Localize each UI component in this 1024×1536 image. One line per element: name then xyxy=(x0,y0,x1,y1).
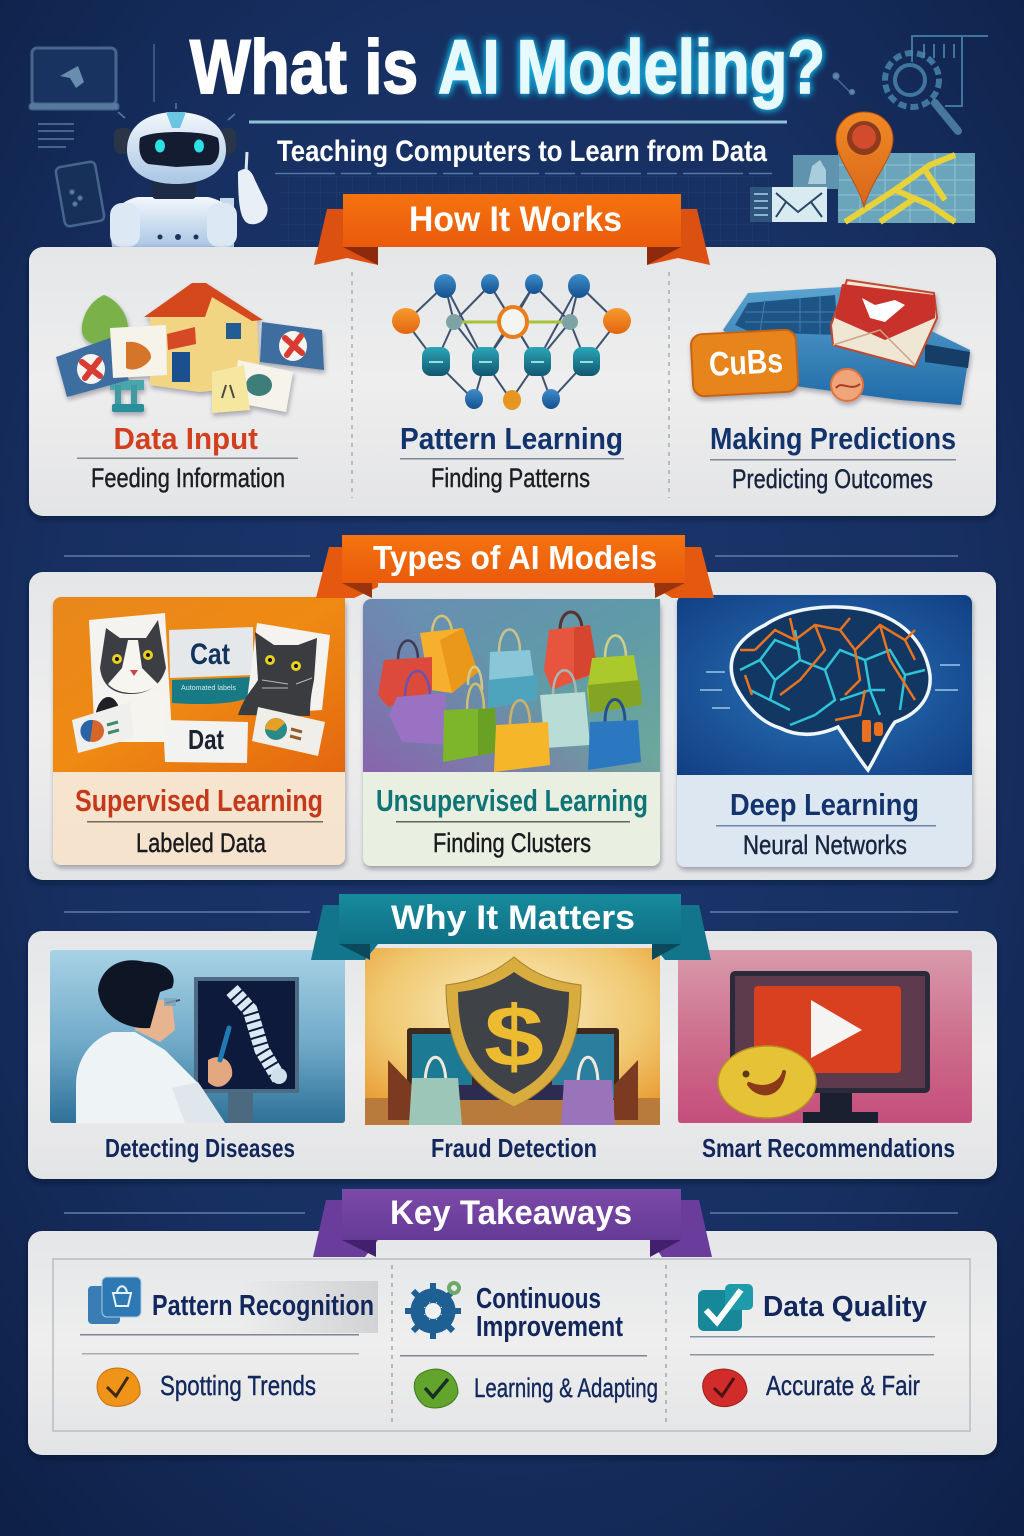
subtitle rule xyxy=(275,172,772,174)
ribbon title: Types of AI Models xyxy=(373,539,657,576)
ribbon: Types of AI Models xyxy=(316,535,714,598)
label: Making Predictions: Making Predictions xyxy=(710,421,956,456)
heading: Continuous xyxy=(476,1283,601,1315)
red bag xyxy=(378,640,432,707)
panel: Why It Matters xyxy=(28,931,997,1179)
illustration: bags xyxy=(409,1057,615,1125)
inner frame xyxy=(53,1259,970,1431)
ribbon title: How It Works xyxy=(409,200,622,239)
ribbon: How It Works xyxy=(314,194,710,265)
sublabel: Predicting Outcomes: Predicting Outcomes xyxy=(732,464,933,494)
robot body xyxy=(110,180,237,247)
robot arm holding stylus xyxy=(220,152,268,247)
header: decorative tech icons xyxy=(30,36,988,227)
ribbon: Why It Matters xyxy=(311,894,711,960)
illustration: x-ray monitor xyxy=(194,977,299,1123)
sublabel: Finding Patterns: Finding Patterns xyxy=(431,463,590,493)
illustration: labeled cat cards xyxy=(72,613,330,763)
image: detecting diseases xyxy=(50,950,345,1123)
yellow bag xyxy=(494,700,550,772)
white and black cat xyxy=(96,620,166,742)
icon: pattern xyxy=(88,1277,141,1324)
icon: tablet xyxy=(55,161,105,227)
pale bag xyxy=(540,670,590,748)
tag text: CuBs xyxy=(708,342,784,384)
illustration: video monitor xyxy=(730,971,930,1123)
section rules: types xyxy=(64,555,958,557)
green bag xyxy=(443,684,497,762)
icon: gears xyxy=(405,1283,461,1339)
map tile xyxy=(838,153,975,223)
panel: Key Takeaways xyxy=(28,1231,997,1455)
sublabel: Neural Networks: Neural Networks xyxy=(743,830,907,860)
icon: laptop xyxy=(30,48,118,109)
ribbon title: Key Takeaways xyxy=(390,1194,632,1232)
illustration: devices xyxy=(365,1028,660,1125)
blue bag xyxy=(588,700,641,770)
icon: shield with dollar xyxy=(446,957,581,1107)
envelope tile xyxy=(750,187,827,222)
label: Deep Learning: Deep Learning xyxy=(730,787,919,822)
purple bag xyxy=(389,671,448,745)
card: Supervised Learning xyxy=(53,597,345,865)
icon: green check xyxy=(414,1369,458,1408)
dark cat xyxy=(238,632,317,716)
dividers xyxy=(392,1265,666,1425)
light blue bag xyxy=(488,630,537,708)
sublabel: Accurate & Fair xyxy=(766,1370,920,1401)
photo tile xyxy=(793,155,839,189)
image: fraud detection xyxy=(365,948,660,1125)
label: Pattern Learning: Pattern Learning xyxy=(400,421,623,456)
icon: data list xyxy=(38,124,74,147)
title: what is: What is xyxy=(190,25,418,110)
heading line 2: Improvement xyxy=(476,1311,623,1343)
lime bag xyxy=(587,636,642,713)
card text: small label: Automated labels xyxy=(181,685,237,692)
sublabel: Learning & Adapting xyxy=(474,1373,658,1403)
icon: predictions car, envelope, tag xyxy=(690,280,970,405)
highlight behind pattern recognition xyxy=(240,1281,378,1333)
card: Unsupervised Learning xyxy=(363,599,660,866)
illustration: shopping bag clusters xyxy=(378,612,642,772)
item: Pattern Recognition xyxy=(80,1277,374,1406)
icon: magnifier with gear xyxy=(885,36,988,131)
illustration: doctor xyxy=(76,960,232,1123)
panel: Types of AI Models xyxy=(29,572,996,880)
subtitle: Teaching Computers to Learn from Data xyxy=(277,135,767,168)
title: AI Modeling?: AI Modeling? xyxy=(438,25,825,110)
heading: Data Quality xyxy=(763,1291,927,1323)
illustration: neural brain xyxy=(700,607,960,770)
red bag large xyxy=(544,612,598,690)
heading: Pattern Recognition xyxy=(152,1290,374,1322)
title underline xyxy=(249,120,787,124)
decorative nodes xyxy=(118,44,854,120)
icon: orange check xyxy=(97,1368,140,1406)
card text: Dat: Dat xyxy=(188,724,224,755)
icon: smiley xyxy=(718,1046,816,1118)
label: Data Input: Data Input xyxy=(114,421,258,456)
ribbon title: Why It Matters xyxy=(391,899,635,937)
item: Data Quality xyxy=(690,1284,935,1407)
section rules: takeaways xyxy=(64,1212,958,1214)
image: smart recommendations xyxy=(678,950,972,1123)
icon: pattern network xyxy=(392,274,631,410)
label: Detecting Diseases: Detecting Diseases xyxy=(105,1133,295,1163)
card: Deep Learning xyxy=(677,595,972,867)
sublabel: Finding Clusters: Finding Clusters xyxy=(433,828,591,858)
item: Continuous Improvement xyxy=(400,1283,658,1408)
section rules: why xyxy=(64,911,958,913)
location pin xyxy=(836,112,893,207)
sublabel: Labeled Data: Labeled Data xyxy=(136,828,267,858)
illustration: robot xyxy=(110,112,268,247)
icon: data input collage xyxy=(56,283,324,413)
hidden bag handle xyxy=(468,667,482,690)
robot head xyxy=(114,112,236,184)
icon: shield with dollar: $ xyxy=(484,989,544,1085)
title xyxy=(190,25,825,110)
panel: How It Works xyxy=(29,247,996,516)
ribbon: Key Takeaways xyxy=(313,1189,712,1257)
illustration: map with location pin xyxy=(750,112,975,223)
sublabel: Feeding Information: Feeding Information xyxy=(91,463,285,493)
orange bag xyxy=(420,616,478,693)
label: Smart Recommendations: Smart Recommendations xyxy=(702,1133,955,1163)
dividers xyxy=(352,272,669,498)
label: Supervised Learning: Supervised Learning xyxy=(75,783,323,818)
icon: red check xyxy=(703,1369,747,1407)
label: Unsupervised Learning: Unsupervised Learning xyxy=(376,783,648,818)
icon: teal check box xyxy=(698,1284,753,1331)
sublabel: Spotting Trends xyxy=(160,1370,316,1401)
label: Fraud Detection: Fraud Detection xyxy=(431,1133,597,1163)
card text: Cat: Cat xyxy=(190,638,230,671)
